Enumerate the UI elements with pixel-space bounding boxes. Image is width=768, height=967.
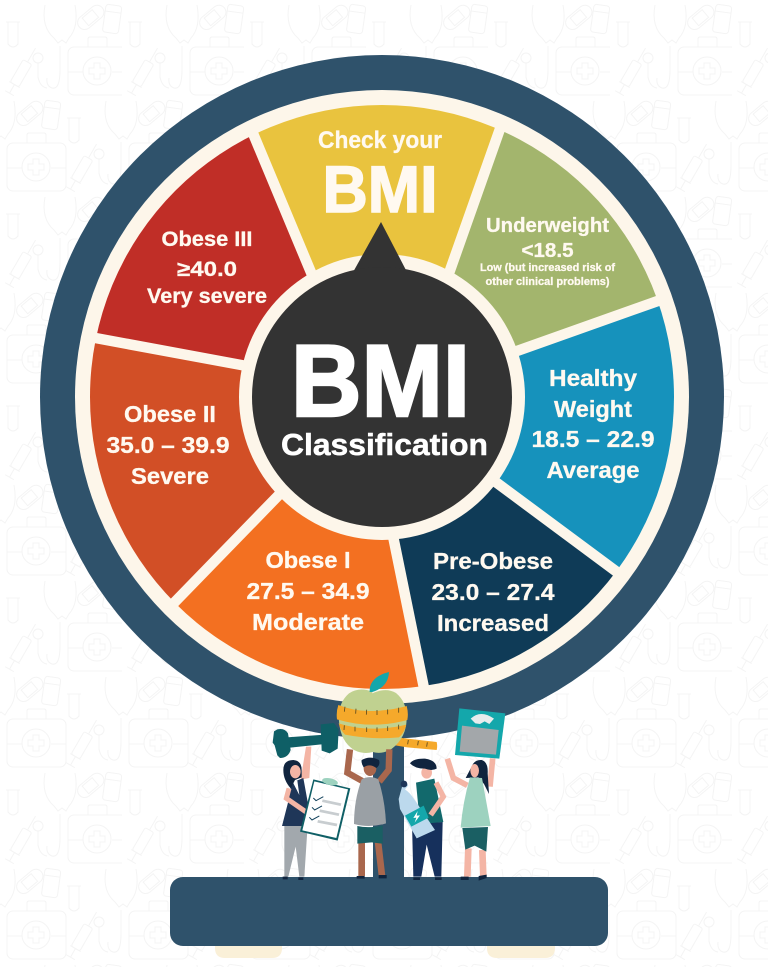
person: woman with water bottle [399,759,443,880]
hub title: BMI [291,324,470,438]
segment: obese I: 27.5 – 34.9 [246,578,370,604]
illustration: people with healthy items [273,672,505,881]
segment: obese III [97,137,306,360]
person: woman holding scale [447,708,505,881]
segment: healthy weight: 18.5 – 22.9 [532,426,654,452]
segment: obese III: ≥40.0 [177,258,237,281]
centre cream circle [239,254,525,540]
segment: obese I [178,499,418,689]
apple with measuring tape [337,672,437,753]
segment: obese II [90,343,275,599]
hub disc [252,267,512,527]
segment: healthy weight: Weight [554,396,632,422]
segment: obese III: Obese III [162,228,252,251]
segment: underweight: other clinical problems) [486,276,610,288]
centre hub [252,222,512,527]
person: man holding apple [347,749,389,879]
base feet [215,940,555,958]
dumbbell [273,723,339,758]
stand base [170,877,608,946]
wheel segments [90,105,674,689]
segment: underweight: Low (but increased risk of [480,262,615,274]
segment: obese II: 35.0 – 39.9 [106,432,230,458]
segment: check your BMI: BMI [322,152,438,226]
segment: healthy weight: Healthy [549,365,637,391]
pointer [352,222,408,274]
segment: check your BMI: Check your [318,127,442,154]
segment: underweight [454,132,656,346]
segment: healthy weight: Average [546,457,640,483]
person: woman with clipboard [282,747,350,880]
segment: pre-obese: Increased [437,610,549,636]
segment: pre-obese: Pre-Obese [433,548,553,574]
hub subtitle: Classification [281,427,488,462]
segment: pre-obese [399,486,613,686]
segment: obese II: Severe [131,463,209,489]
segment: obese III: Very severe [147,285,267,308]
segment: underweight: <18.5 [522,240,574,262]
outer ring [40,55,724,739]
segment: obese II: Obese II [124,401,216,427]
stand stem [373,730,404,880]
segment: obese I: Moderate [252,609,364,635]
inner cream ring [75,90,689,704]
segment: healthy weight [500,306,674,568]
segment: pre-obese: 23.0 – 27.4 [432,579,555,605]
segment: check your BMI [258,105,495,270]
segment: underweight: Underweight [486,215,609,237]
segment: obese I: Obese I [266,547,350,573]
